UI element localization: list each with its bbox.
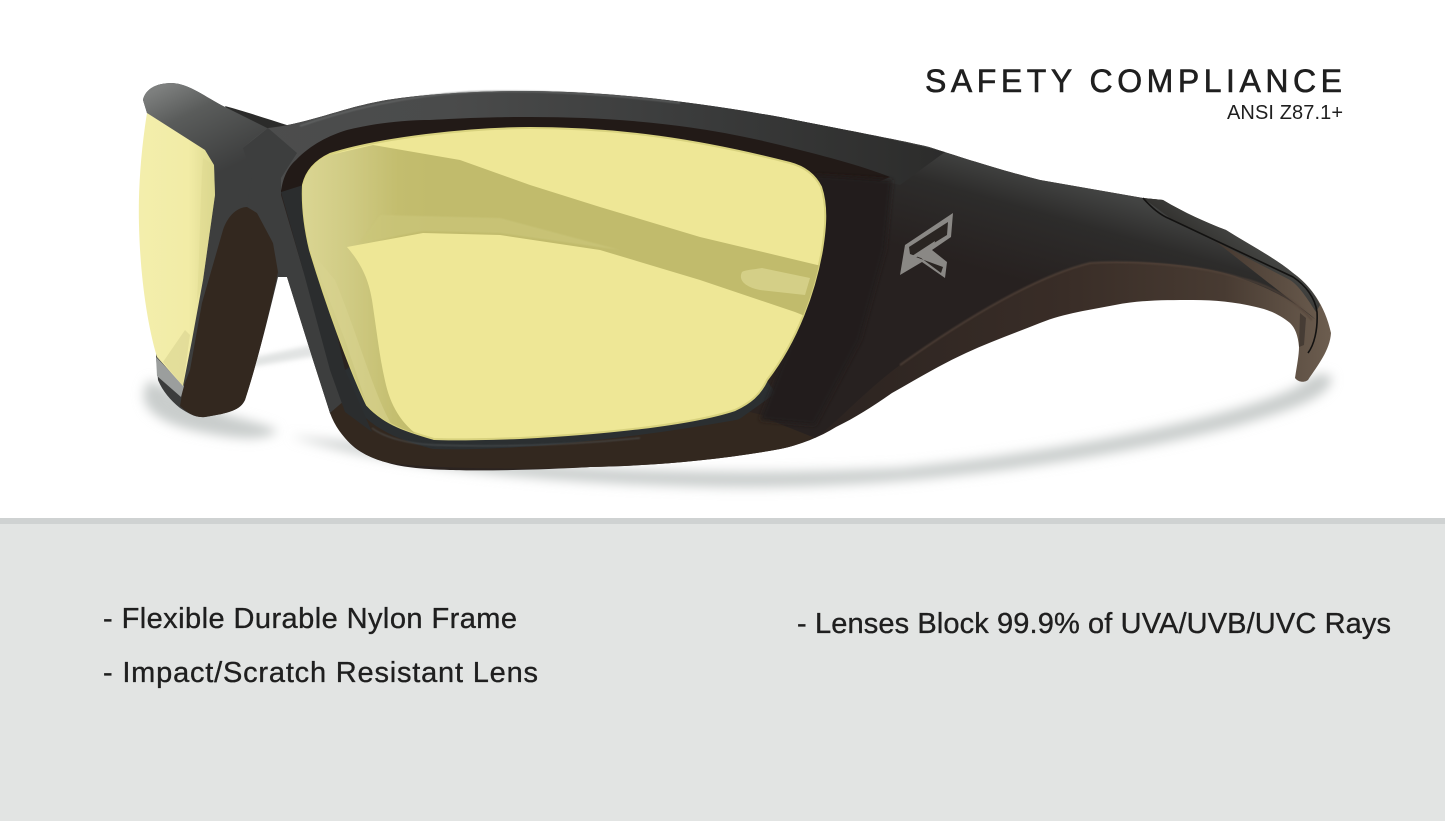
brown arm highlight [900, 262, 1312, 365]
lighter band inside reflection [397, 216, 602, 246]
brown lower frame [320, 380, 825, 469]
nose pad [180, 207, 278, 417]
left lens [139, 113, 215, 386]
left frame side [143, 83, 300, 417]
heading: safety compliance [925, 63, 1343, 124]
main frame and temple [243, 91, 1331, 470]
lens reflection of temple [290, 145, 830, 440]
temple cap [1143, 198, 1320, 312]
feature list: left column [103, 603, 538, 689]
main lens [290, 128, 830, 440]
ground shadow [144, 345, 1332, 487]
feature: lens: - Impact/Scratch Resistant Lens [103, 657, 538, 689]
brow band [243, 91, 945, 190]
panel: feature list background [0, 518, 1445, 821]
icon: brand logo on temple [900, 213, 953, 278]
reflected temple tip highlight [741, 268, 810, 295]
upper temple dark body [770, 117, 1316, 438]
feature list: right column: - Lenses Block 99.9% of UVA/UVB/UVC Rays [797, 608, 1391, 640]
lens edge soft light [355, 334, 390, 423]
silver lower rim [156, 357, 184, 397]
temple cap seam [1143, 198, 1317, 353]
dark area beside lens [760, 175, 892, 425]
bridge gray body [243, 128, 345, 413]
product illustration: safety glasses [139, 83, 1332, 487]
dark inner rim around lens [281, 117, 890, 205]
feature: frame: - Flexible Durable Nylon Frame [103, 603, 517, 635]
far temple behind brow [225, 106, 290, 136]
title: SAFETY COMPLIANCE [925, 63, 1342, 99]
bottom rim sheen [372, 428, 640, 446]
left dark rim [281, 185, 372, 432]
bottom rim [345, 370, 770, 439]
brow top highlight [300, 91, 680, 126]
subtitle: ANSI Z87.1+ [1227, 102, 1343, 124]
